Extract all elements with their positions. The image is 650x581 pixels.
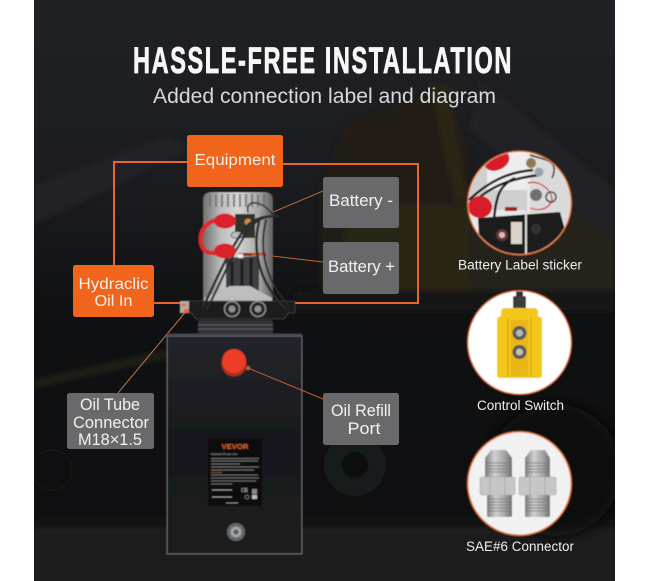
drain bolt <box>227 523 245 541</box>
product label: VEVOR <box>222 444 248 451</box>
subtitle: Added connection label and diagram <box>153 84 496 108</box>
label: Battery plus <box>323 242 399 294</box>
leader line: oil refill port <box>248 368 323 399</box>
label: Oil Refill Port: Oil Refill <box>331 402 391 420</box>
product label: Hydraulic Power Unit <box>211 452 237 456</box>
label: Equipment: Equipment <box>194 152 276 169</box>
label: Battery plus: Battery + <box>328 258 395 276</box>
label: Oil Tube Connector: Connector <box>73 414 149 432</box>
label: Oil Tube Connector: Oil Tube <box>80 396 140 414</box>
label: Oil Refill Port: Port <box>348 420 381 438</box>
label: Hydraclic Oil In: Hydraclic <box>78 276 149 293</box>
hydraulic power unit product <box>167 192 302 554</box>
wiring <box>203 203 288 309</box>
caption: SAE#6 Connector: SAE#6 Connector <box>466 539 575 554</box>
label: Equipment <box>187 135 283 187</box>
caption: Control Switch: Control Switch <box>477 398 564 413</box>
caption: Battery Label sticker: Battery Label sticker <box>458 258 583 272</box>
motor body <box>203 192 273 304</box>
motor bell housing <box>167 320 302 336</box>
label: Oil Tube Connector <box>67 393 154 449</box>
label: Oil Refill Port <box>323 393 399 445</box>
label: Oil Tube Connector: M18×1.5 <box>78 431 142 449</box>
label: Battery minus <box>323 177 399 228</box>
label: Hydraclic Oil In <box>73 265 154 317</box>
label: Hydraclic Oil In: Oil In <box>94 293 132 310</box>
circle: control switch <box>468 290 572 394</box>
connector lines <box>114 162 418 393</box>
label: Battery minus: Battery - <box>329 192 393 210</box>
product label: CE <box>241 488 249 494</box>
circle: SAE#6 connector fittings <box>468 432 572 536</box>
red refill cap <box>222 349 250 376</box>
circle: battery label sticker <box>467 147 575 255</box>
product label <box>208 439 262 506</box>
manifold block <box>180 301 295 319</box>
fitting right <box>519 450 556 517</box>
red battery cable cover <box>201 214 236 258</box>
oil tank <box>167 336 302 554</box>
fitting left <box>480 450 515 517</box>
